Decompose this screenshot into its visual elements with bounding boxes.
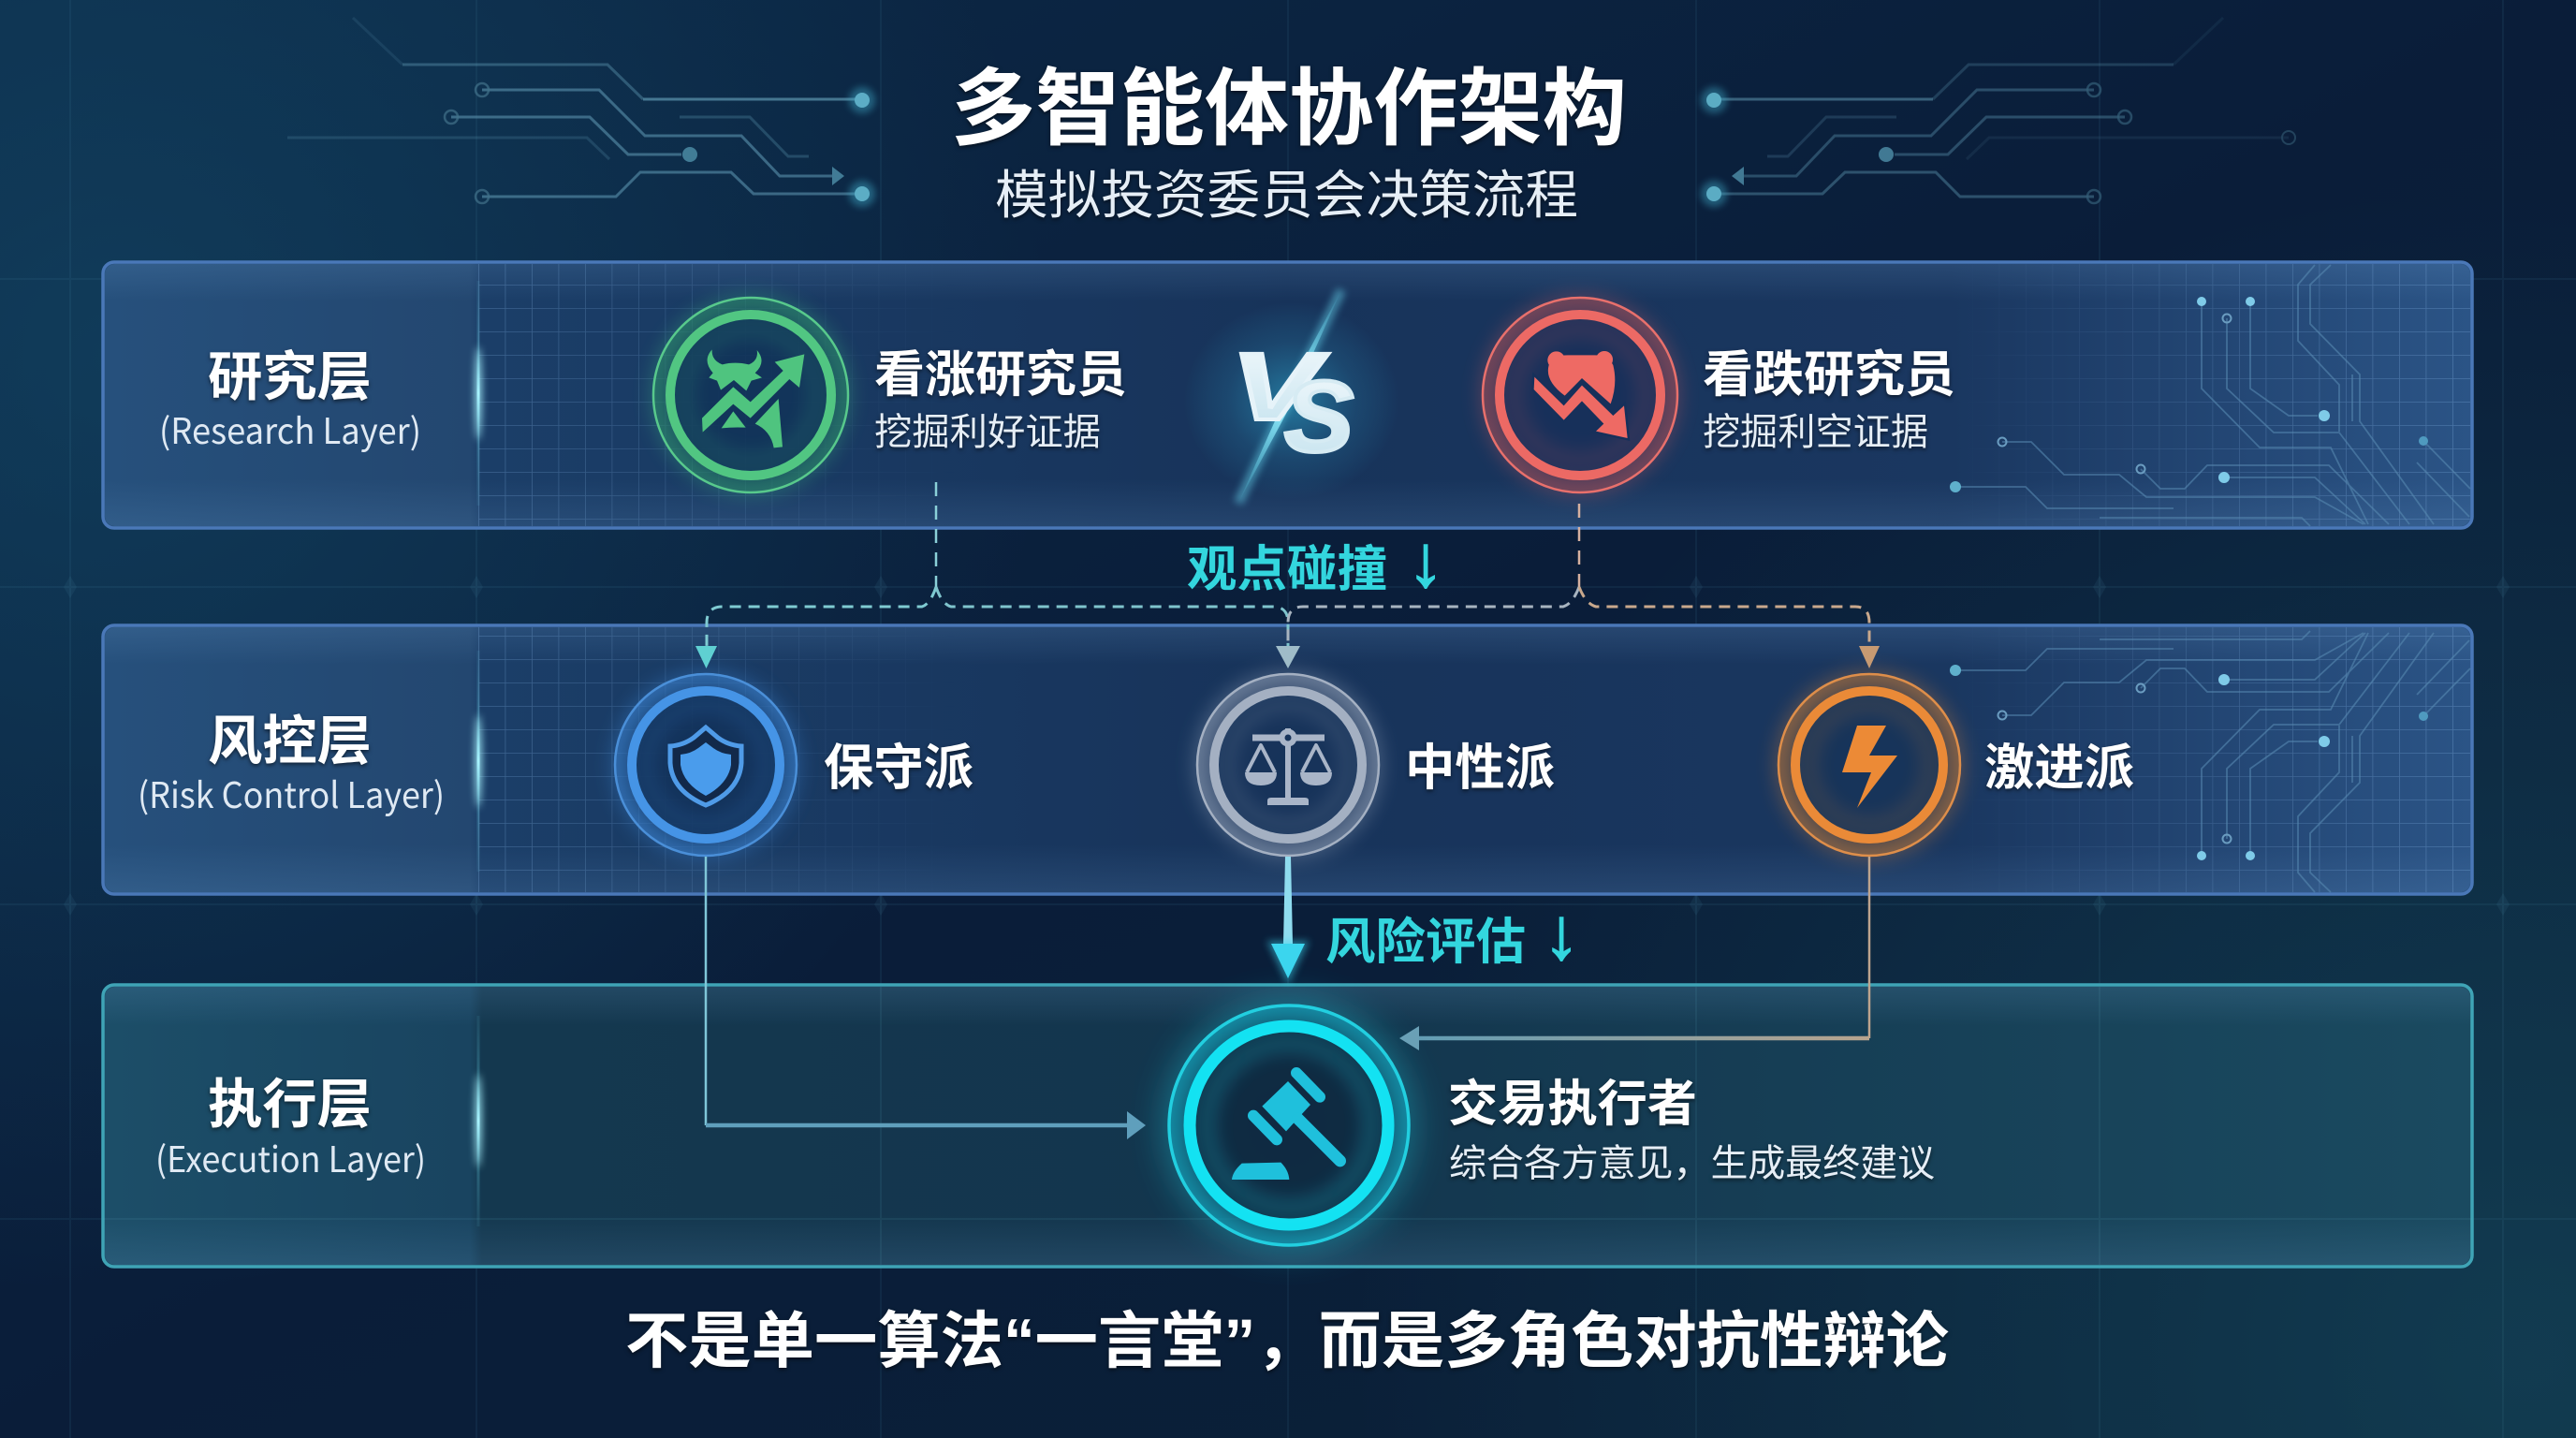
- label: risk control layer: [138, 712, 445, 818]
- label: execution layer: (Execution Layer): [155, 1131, 426, 1182]
- bottom tagline: 不是单一算法“一言堂”，而是多角色对抗性辩论: [625, 1306, 1949, 1375]
- label: research layer: (Research Layer): [159, 403, 421, 454]
- circuit traces: research right: [1950, 265, 2470, 526]
- text: trader: 综合各方意见，生成最终建议: [1449, 1143, 1935, 1184]
- text: trader: 交易执行者: [1448, 1077, 1697, 1132]
- VS badge: V: [1231, 333, 1329, 440]
- subtitle: 模拟投资委员会决策流程: [995, 166, 1578, 225]
- label: research layer: [159, 347, 421, 454]
- panel: risk control layer: [103, 625, 2472, 894]
- icon: shield: [615, 674, 797, 856]
- label: execution layer: 执行层: [208, 1075, 372, 1135]
- icon: bull: [653, 298, 848, 492]
- text: aggressive: 激进派: [1984, 741, 2134, 796]
- text: neutral: 中性派: [1405, 741, 1555, 796]
- label: research layer: 研究层: [208, 347, 372, 407]
- arrow: dashed flow from bull researcher: [695, 482, 1288, 668]
- label: execution layer: [155, 1075, 426, 1182]
- panel: execution layer: [103, 985, 2472, 1267]
- text: bear researcher: 看跌研究员: [1703, 347, 1955, 403]
- text: bull researcher: 挖掘利好证据: [874, 412, 1101, 453]
- VS badge: [1184, 290, 1399, 503]
- label: risk assessment: ↓: [1543, 892, 1580, 975]
- label: risk assessment: 风险评估: [1325, 915, 1526, 970]
- icon: scales: [1197, 674, 1379, 856]
- label: risk assessment: [1325, 892, 1580, 975]
- text: conservative: 保守派: [824, 741, 973, 796]
- text: bull researcher: [874, 347, 1127, 453]
- text: bear researcher: 挖掘利空证据: [1703, 412, 1928, 453]
- arrow: aggressive to trader: [1399, 857, 1869, 1050]
- text: bear researcher: [1703, 347, 1955, 453]
- VS badge: S: [1284, 360, 1354, 473]
- circuit decoration: top left: [287, 18, 875, 207]
- label: viewpoint collision: [1187, 520, 1443, 602]
- text: bull researcher: 看涨研究员: [874, 347, 1127, 403]
- label: risk control layer: (Risk Control Layer): [138, 767, 445, 818]
- icon: gavel: [1169, 1005, 1409, 1245]
- circuit decoration: top right: [1701, 18, 2295, 207]
- panel: research layer: [103, 262, 2472, 528]
- arrow: dashed flow from bear researcher: [1276, 504, 1880, 668]
- label: viewpoint collision: ↓: [1408, 520, 1443, 602]
- icon: bear: [1483, 298, 1677, 492]
- circuit traces: risk right: [1950, 631, 2470, 892]
- label: risk control layer: 风控层: [208, 712, 372, 771]
- arrow: conservative to trader: [706, 857, 1146, 1139]
- title: 多智能体协作架构: [951, 63, 1627, 156]
- arrow: neutral to trader: [1271, 857, 1305, 978]
- icon: lightning: [1778, 674, 1960, 856]
- text: trader: [1448, 1077, 1935, 1184]
- label: viewpoint collision: 观点碰撞: [1187, 542, 1387, 597]
